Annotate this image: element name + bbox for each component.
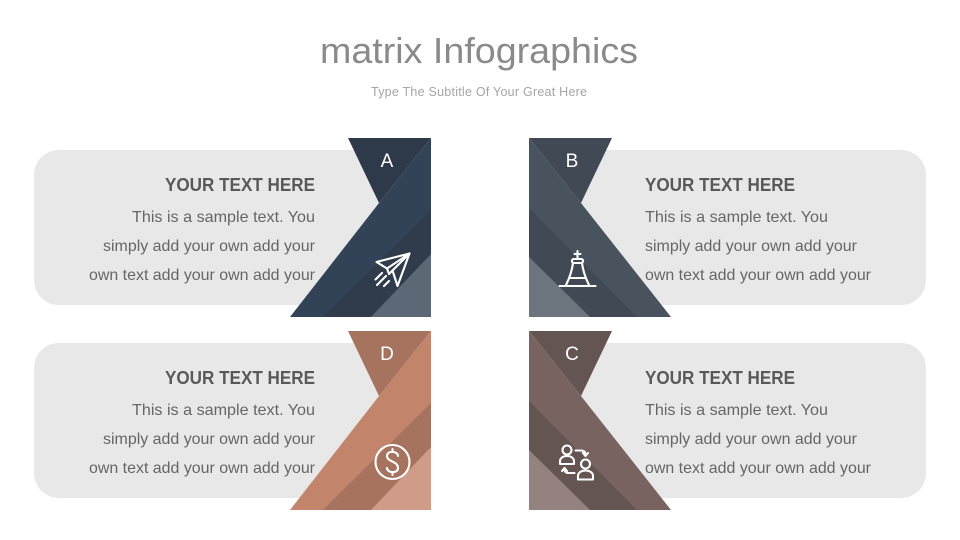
body text D: simply add your own add your (103, 431, 316, 448)
heading C: YOUR TEXT HERE (645, 367, 795, 388)
body text A (89, 209, 316, 284)
body text D: own text add your own add your (89, 460, 316, 477)
body text B: own text add your own add your (645, 267, 872, 284)
body text B: This is a sample text. You (645, 209, 828, 226)
body text A: This is a sample text. You (132, 209, 315, 226)
body text B (645, 209, 872, 284)
letter D: D (380, 344, 394, 365)
subtitle: Type The Subtitle Of Your Great Here (371, 85, 587, 99)
ribbon B (529, 138, 671, 317)
body text D: This is a sample text. You (132, 402, 315, 419)
card background D (34, 343, 414, 498)
icon: dollar coin (376, 445, 410, 479)
body text C: This is a sample text. You (645, 402, 828, 419)
card background C (546, 343, 926, 498)
ribbon C (529, 331, 671, 510)
letter C: C (565, 344, 579, 365)
body text C (645, 402, 872, 477)
panel: C (529, 331, 926, 510)
letter B: B (566, 151, 578, 172)
heading D: YOUR TEXT HERE (165, 367, 315, 388)
body text C: own text add your own add your (645, 460, 872, 477)
ribbon D (290, 331, 431, 510)
body text B: simply add your own add your (645, 238, 858, 255)
heading A: YOUR TEXT HERE (165, 174, 315, 195)
body text A: simply add your own add your (103, 238, 316, 255)
letter A: A (381, 151, 394, 172)
card background B (546, 150, 926, 305)
panel: A (34, 138, 431, 317)
body text D (89, 402, 316, 477)
title: matrix Infographics (320, 30, 638, 71)
icon: chess king (560, 251, 596, 286)
card background A (34, 150, 414, 305)
icon: people exchange (560, 446, 593, 480)
heading B: YOUR TEXT HERE (645, 174, 795, 195)
icon: paper plane (376, 254, 410, 286)
panel: B (529, 138, 926, 317)
body text A: own text add your own add your (89, 267, 316, 284)
panel: D (34, 331, 431, 510)
body text C: simply add your own add your (645, 431, 858, 448)
ribbon A (290, 138, 431, 317)
